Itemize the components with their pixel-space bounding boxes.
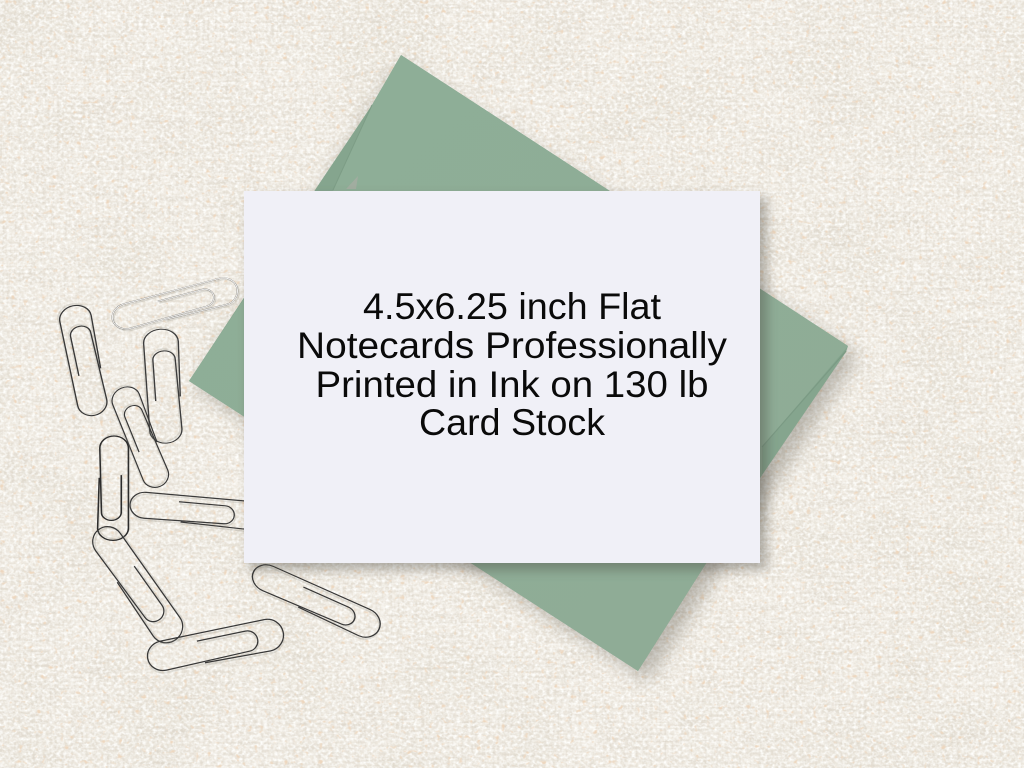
notecard panel [244,191,767,570]
paperclip: upper middle [141,326,185,444]
paperclip: vertical lower left [98,434,130,540]
paperclip: below card [246,560,385,644]
card heading text: Notecards Professionally [297,325,728,366]
card heading text: 4.5x6.25 inch Flat [363,286,662,327]
paperclip: partly under card [129,491,261,532]
paperclip: top horizontal [109,274,242,336]
paperclip: diagonal middle [107,381,174,492]
paperclip: bottom [145,616,287,678]
card heading text [297,286,728,443]
card heading text: Printed in Ink on 130 lb [316,364,708,405]
paperclip: far left [56,301,112,419]
paperclip: long diagonal lower left [85,520,191,651]
card heading text: Card Stock [419,402,606,443]
green envelope [189,55,858,681]
